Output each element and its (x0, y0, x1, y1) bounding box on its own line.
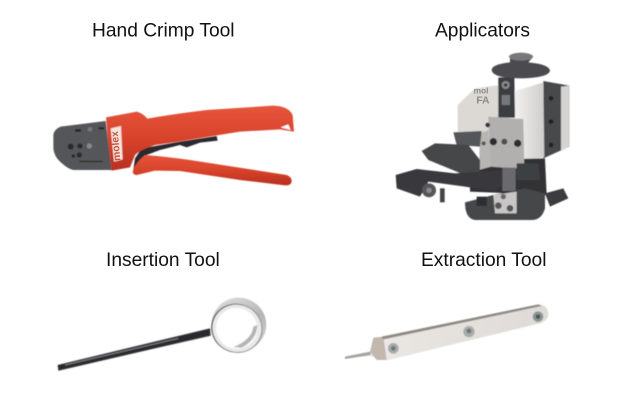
heading: Applicators: Applicators (435, 20, 530, 42)
icon: insertion tool (58, 290, 274, 371)
logo text: molex FA (474, 86, 490, 106)
logo text: molex FA: FA (476, 95, 490, 106)
heading: Extraction Tool: Extraction Tool (421, 250, 546, 271)
logo text: molex FA: mol (474, 86, 488, 96)
heading: Hand Crimp Tool: Hand Crimp Tool (92, 20, 235, 42)
logo text: molex: molex (110, 130, 123, 161)
heading: Insertion Tool: Insertion Tool (106, 250, 220, 271)
icon: hand crimp tool (53, 106, 294, 185)
icon: extraction tool (345, 304, 548, 360)
icon: applicator machine (396, 53, 569, 220)
